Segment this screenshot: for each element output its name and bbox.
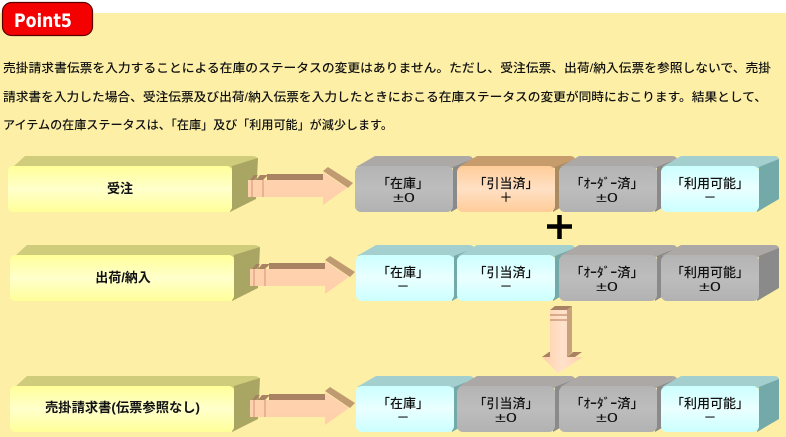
status: 在庫 − — [356, 245, 474, 301]
row: 売掛請求書 — [10, 376, 779, 432]
status: 引当済 −: 「引当済」 — [473, 265, 539, 280]
status: 利用可能 −: － — [703, 190, 717, 205]
status: 引当済 −: － — [499, 279, 513, 294]
arrow: 受注 to statuses — [248, 167, 353, 205]
badge: Point5 — [2, 2, 92, 36]
status: 引当済 ±0: 「引当済」 — [473, 396, 539, 411]
text block: explanation: 請求書を入力した場合、受注伝票及び出荷/納入伝票を入力したときにおこる在庫ステータスの変更が同時におこります。結果として、 — [3, 89, 767, 104]
row: 受注 — [8, 156, 779, 212]
arrow: 出荷/納入 to statuses — [250, 256, 355, 294]
source box: 受注: 受注 — [107, 181, 133, 196]
arrow: 売掛請求書 to statuses — [250, 387, 355, 425]
badge: Point5: Point5 — [14, 10, 72, 32]
status: 利用可能 − — [661, 376, 779, 432]
arrow: down to result — [542, 306, 583, 373]
status: オーダー済 ±0 — [559, 156, 677, 212]
status: オーダー済 ±0: ±0 — [596, 410, 618, 425]
status: 利用可能 −: － — [703, 410, 717, 425]
text block: explanation: 売掛請求書伝票を入力することによる在庫のステータスの変更はありません。ただし、受注伝票、出荷/納入伝票を参照しないで、売掛 — [3, 60, 771, 75]
status: 引当済 ±0 — [457, 376, 575, 432]
status: 引当済 ±0: ±0 — [495, 410, 517, 425]
source box: 売掛請求書(伝票参照なし): 売掛請求書(伝票参照なし) — [45, 400, 200, 415]
plus sign — [547, 215, 572, 239]
status: オーダー済 ±0: 「ｵｰﾀﾞｰ済」 — [570, 265, 644, 280]
status: 在庫 − — [356, 376, 474, 432]
status: 在庫 −: 「在庫」 — [377, 265, 429, 280]
status: 利用可能 ±0: 「利用可能」 — [671, 265, 749, 280]
status: 利用可能 ±0: ±0 — [699, 279, 721, 294]
status: 在庫 ±0: 「在庫」 — [377, 176, 429, 191]
status: 利用可能 ±0 — [661, 245, 779, 301]
status: 利用可能 −: 「利用可能」 — [671, 176, 749, 191]
source box: 出荷/納入 — [10, 245, 260, 301]
status: 引当済 +: 「引当済」 — [473, 176, 539, 191]
source box: 出荷/納入: 出荷/納入 — [95, 270, 151, 285]
status: オーダー済 ±0 — [559, 245, 677, 301]
status: オーダー済 ±0 — [559, 376, 677, 432]
status: 利用可能 − — [661, 156, 779, 212]
status: 在庫 ±0 — [355, 156, 473, 212]
status: オーダー済 ±0: 「ｵｰﾀﾞｰ済」 — [570, 176, 644, 191]
status: 在庫 ±0: ±0 — [393, 190, 415, 205]
status: 引当済 +: ＋ — [499, 190, 513, 205]
text block: explanation — [3, 60, 771, 132]
status: 引当済 − — [457, 245, 575, 301]
source box: 売掛請求書(伝票参照なし) — [10, 376, 260, 432]
status: 引当済 + — [457, 156, 575, 212]
source box: 受注 — [8, 156, 258, 212]
status: 利用可能 −: 「利用可能」 — [671, 396, 749, 411]
row: 出荷/納入 — [10, 245, 779, 301]
text block: explanation: アイテムの在庫ステータスは、「在庫」及び「利用可能」が減少します。 — [3, 117, 393, 132]
status: オーダー済 ±0: ±0 — [596, 190, 618, 205]
status: 在庫 −: 「在庫」 — [377, 396, 429, 411]
status: オーダー済 ±0: ±0 — [596, 279, 618, 294]
status: 在庫 −: － — [396, 279, 410, 294]
status: オーダー済 ±0: 「ｵｰﾀﾞｰ済」 — [570, 396, 644, 411]
status: 在庫 −: － — [396, 410, 410, 425]
